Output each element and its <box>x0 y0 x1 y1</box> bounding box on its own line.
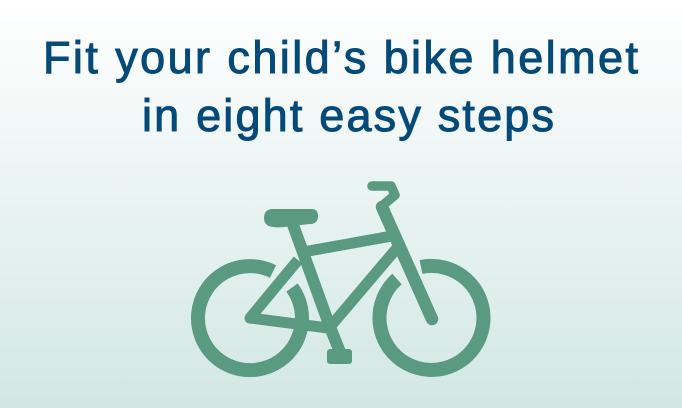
saddle <box>264 209 318 227</box>
seat post and crank <box>292 222 340 352</box>
title: in eight easy steps <box>142 90 554 141</box>
title: Fit your child’s bike helmet <box>43 32 638 83</box>
right wheel <box>379 266 483 370</box>
title <box>43 32 638 141</box>
left wheel <box>198 266 302 370</box>
handlebar <box>372 186 395 206</box>
fork <box>382 207 432 319</box>
frame <box>250 236 397 328</box>
pedal <box>327 349 352 364</box>
icon: bicycle <box>198 186 483 370</box>
